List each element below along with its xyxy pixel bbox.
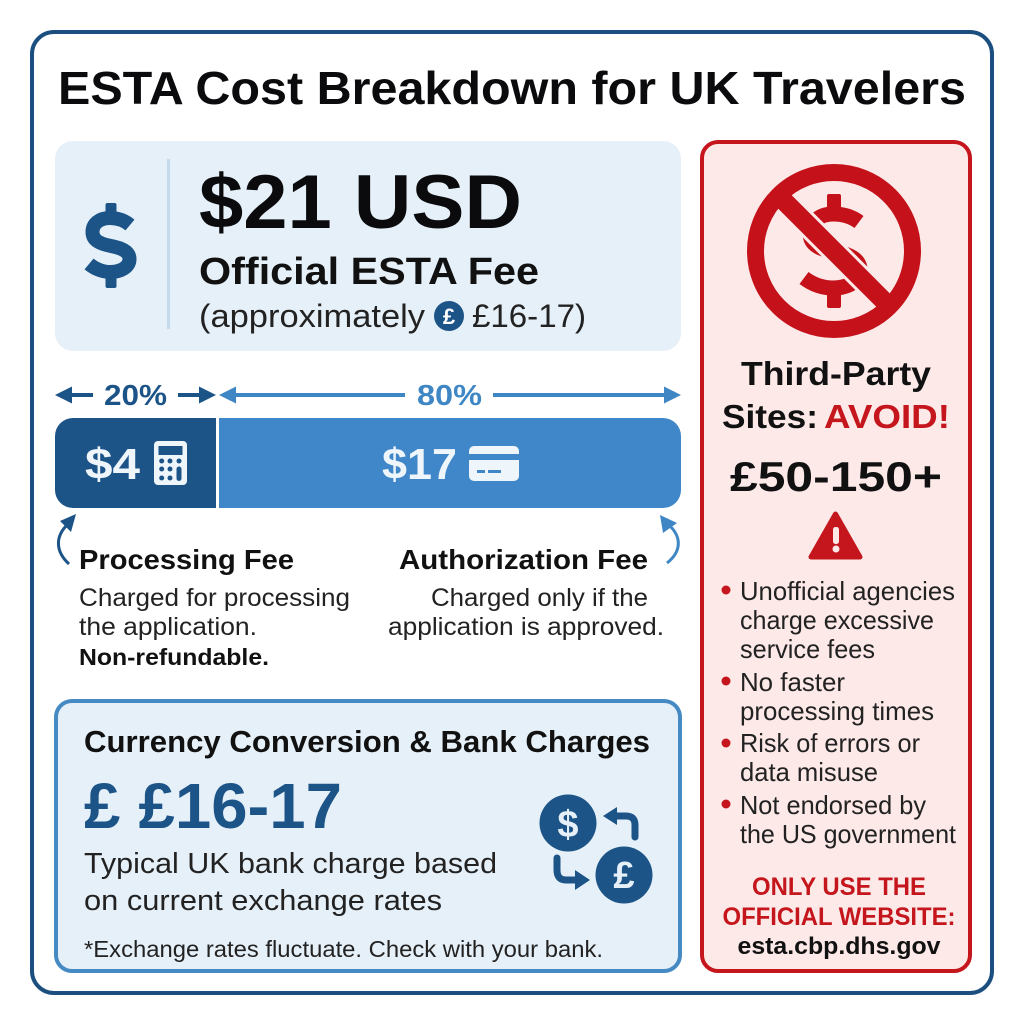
bar: processing fee segment — [55, 418, 216, 508]
fee label: Official ESTA Fee — [199, 251, 539, 293]
warning list: Not endorsed by — [740, 790, 926, 820]
currency description: Typical UK bank charge based — [84, 848, 497, 880]
icon: currency exchange — [540, 794, 652, 904]
icon: calculator — [154, 441, 187, 485]
icon: no dollar — [756, 172, 912, 330]
text: processing fee: Processing Fee — [79, 544, 294, 575]
panel: official fee — [55, 141, 681, 351]
fee approximate — [199, 298, 586, 334]
panel: currency conversion: on current exchange rates — [84, 885, 442, 917]
text: authorization fee — [388, 544, 664, 641]
warning call to action: ONLY USE THE — [752, 873, 926, 901]
warning list: Unofficial agencies — [740, 576, 955, 606]
warning call to action: esta.cbp.dhs.gov — [738, 933, 941, 960]
warning list: No faster — [740, 667, 845, 697]
text: authorization fee: Charged only if the — [431, 584, 648, 612]
text: authorization fee: Authorization Fee — [399, 544, 648, 575]
warning heading: Third-Party — [741, 355, 932, 392]
panel: third-party warning: Sites: — [722, 398, 818, 435]
icon: credit card — [469, 446, 519, 481]
text: processing fee: Non-refundable. — [79, 644, 269, 670]
arrow: to authorization fee — [660, 515, 678, 563]
text: processing fee — [79, 544, 350, 670]
panel: third-party warning: AVOID! — [824, 398, 950, 435]
currency heading: Currency Conversion & Bank Charges — [84, 724, 650, 759]
icon: warning triangle — [811, 514, 860, 557]
panel: currency conversion — [56, 701, 680, 971]
warning list — [722, 576, 957, 849]
panel: third-party warning — [702, 142, 970, 971]
warning list: service fees — [740, 634, 875, 664]
bar: authorization fee segment: $17 — [382, 440, 457, 489]
warning call to action — [722, 873, 956, 960]
warning call to action: OFFICIAL WEBSITE: — [722, 903, 956, 931]
warning list: the US government — [740, 819, 957, 849]
warning price: £50-150+ — [730, 453, 942, 500]
fee approximate: (approximately — [199, 298, 425, 334]
icon: currency exchange: £ — [613, 855, 635, 897]
text: processing fee: Charged for processing — [79, 584, 350, 612]
text: authorization fee: application is approved. — [388, 613, 664, 641]
arrow: to processing fee — [58, 514, 76, 564]
text: processing fee: the application. — [79, 613, 257, 641]
fee approximate: £16-17) — [472, 298, 586, 334]
warning list: charge excessive — [740, 605, 934, 635]
warning list: data misuse — [740, 757, 878, 787]
bar: processing fee segment: $4 — [85, 440, 141, 489]
fee approximate: £ — [443, 304, 456, 329]
arrow: 20 percent — [55, 380, 216, 412]
fee amount: $21 USD — [199, 160, 522, 245]
arrow: 20 percent: 20% — [104, 380, 167, 412]
currency footnote: *Exchange rates fluctuate. Check with your bank. — [84, 936, 603, 962]
arrow: 80 percent — [219, 380, 681, 412]
arrow: 80 percent: 80% — [417, 380, 482, 412]
warning list: Risk of errors or — [740, 728, 920, 758]
icon: dollar sign — [89, 203, 130, 288]
warning list: processing times — [740, 696, 934, 726]
icon: currency exchange: $ — [557, 804, 579, 846]
title: ESTA Cost Breakdown for UK Travelers — [58, 62, 966, 114]
currency amount: £ £16-17 — [84, 770, 342, 842]
bar: authorization fee segment — [219, 418, 681, 508]
